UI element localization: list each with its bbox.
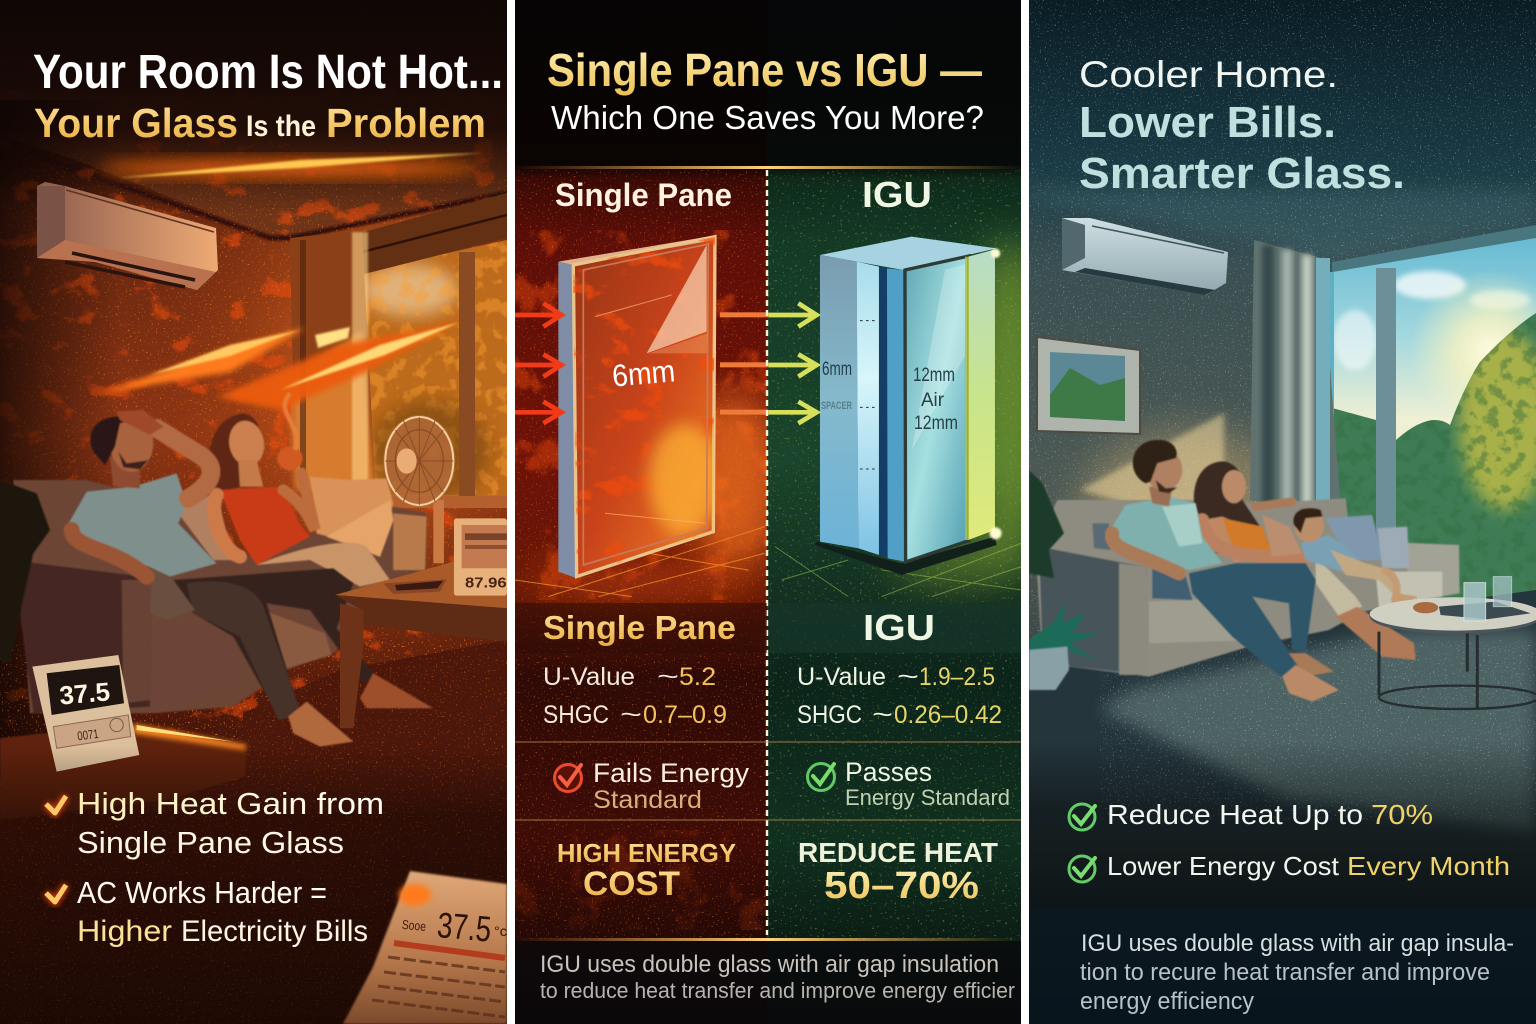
potted plant	[1029, 603, 1101, 690]
footer note: energy efficiency	[1080, 988, 1254, 1015]
spec table: IGU: ~	[872, 701, 893, 729]
benefit: reduce heat: 70%	[1371, 799, 1433, 830]
title: Cooler Home.	[1079, 54, 1338, 95]
benefit: lower energy cost	[1069, 851, 1510, 882]
icon: thermostat: 0071	[77, 727, 99, 743]
floor perspective lines	[515, 527, 1021, 597]
benefit: lower energy cost: Lower Energy Cost	[1107, 851, 1340, 881]
footer note	[1029, 908, 1536, 1024]
heat arrows	[515, 303, 817, 423]
sofa	[1036, 498, 1460, 677]
bullet: heat gain	[46, 786, 384, 860]
illustration: couple on sofa	[0, 393, 507, 820]
illustration: single pane glass	[558, 236, 715, 578]
callout: reduce heat	[798, 837, 998, 907]
coffee table	[1370, 577, 1536, 709]
plant on left	[1029, 470, 1064, 578]
floor and rug	[1029, 590, 1536, 830]
footer note: to reduce heat transfer and improve energy efficier	[540, 978, 1015, 1003]
receipt: electricity bill	[343, 871, 507, 1024]
spec table: IGU: IGU	[863, 607, 935, 648]
callout: reduce heat: 50–70%	[824, 865, 979, 907]
icon: electric fan	[383, 415, 455, 563]
heat beams through window	[100, 322, 460, 410]
bottom shade	[1029, 740, 1536, 1024]
status: passes energy standard: Energy Standard	[845, 785, 1010, 810]
callout: high energy cost	[557, 838, 736, 903]
footer glow line	[515, 938, 1021, 941]
bullet: heat gain: High Heat Gain from	[77, 786, 384, 821]
footer note: IGU uses double glass with air gap insula-	[1081, 930, 1514, 957]
status: passes energy standard	[808, 757, 1010, 810]
title	[34, 54, 500, 138]
sunlight patch on wall	[1080, 413, 1224, 510]
spec table: single pane	[515, 603, 767, 729]
plant	[0, 480, 50, 663]
title: Which One Saves You More?	[551, 99, 984, 136]
title: Smarter Glass.	[1079, 149, 1405, 198]
window with sky and trees	[1320, 225, 1536, 610]
spec table: single pane: Single Pane	[543, 609, 736, 646]
icon: air conditioner	[1062, 218, 1228, 295]
spec table: single pane: 5.2	[679, 663, 716, 691]
desk display: 87.96	[465, 575, 507, 591]
IGU layer labels: Air	[921, 390, 945, 411]
status: fails energy standard: Standard	[593, 786, 702, 814]
footer note: IGU uses double glass with air gap insulation	[540, 951, 999, 978]
woman	[1194, 462, 1416, 660]
status: fails energy standard	[554, 758, 750, 814]
glass fire texture	[573, 237, 721, 577]
title: Single Pane vs IGU —	[547, 44, 982, 96]
receipt: electricity bill: Sooe	[401, 917, 427, 934]
column header: IGU: IGU	[862, 174, 932, 215]
bullet: heat gain: Single Pane Glass	[77, 825, 344, 860]
spec table: IGU: 0.26–0.42	[894, 701, 1002, 729]
IGU layer labels	[821, 359, 958, 434]
IGU layer labels: 12mm	[913, 365, 955, 386]
icon: air conditioner	[37, 182, 218, 290]
woman	[207, 393, 390, 587]
title	[1079, 54, 1405, 198]
panel: single pane vs IGU comparison	[515, 0, 1050, 1024]
bullet: electricity bills: AC Works Harder =	[77, 875, 327, 910]
carpet speckle	[0, 640, 507, 1024]
title: Problem	[326, 100, 486, 146]
title: Your Room Is Not Hot...	[33, 46, 503, 99]
wall picture	[1037, 337, 1140, 434]
receipt: electricity bill: °c	[494, 923, 507, 939]
callout: reduce heat: REDUCE HEAT	[798, 837, 998, 868]
panel: hot room problem	[0, 0, 507, 1024]
benefit: reduce heat: Reduce Heat Up to	[1107, 799, 1363, 830]
illustration: family on sofa	[1029, 440, 1536, 709]
curtain	[1250, 240, 1340, 515]
glass highlight	[583, 244, 708, 565]
illustration: insulated glass unit	[815, 237, 1002, 575]
benefit: lower energy cost: Every Month	[1347, 851, 1510, 881]
icon: thermostat: 37.5	[58, 676, 111, 711]
bottom shade	[0, 745, 507, 1024]
bullet: electricity bills: Electricity Bills	[181, 915, 368, 948]
center dashed divider	[766, 170, 768, 935]
status: passes energy standard: Passes	[845, 757, 932, 787]
child	[1294, 508, 1406, 603]
spec table: single pane: ~	[620, 701, 642, 729]
title	[548, 52, 983, 130]
receipt: electricity bill: 37.5	[436, 904, 493, 950]
curtain	[290, 230, 376, 500]
panel: cooler home solution	[1029, 0, 1536, 1024]
footer note: tion to recure heat transfer and improve	[1080, 959, 1490, 986]
label: 6mm single pane: 6mm	[611, 353, 677, 394]
spec table: IGU: 1.9–2.5	[919, 663, 995, 691]
spec table: IGU: SHGC	[797, 701, 862, 729]
sofa	[13, 477, 427, 713]
spec table: single pane: U-Value	[543, 663, 635, 691]
top glow line	[515, 166, 1021, 169]
spec table: IGU: ~	[897, 663, 919, 691]
callout: high energy cost: COST	[583, 865, 680, 903]
carpet	[0, 640, 507, 1024]
desk display	[454, 518, 507, 596]
man	[1107, 440, 1339, 702]
side table with glow	[0, 723, 247, 820]
IGU layer labels: SPACER	[821, 400, 852, 412]
bullet: electricity bills: Higher	[77, 915, 172, 948]
man	[67, 410, 433, 747]
window with orange trees	[360, 193, 507, 508]
spec table: IGU	[769, 603, 1021, 729]
row dividers	[515, 742, 1021, 820]
title: Is the	[246, 110, 316, 143]
IGU layer labels: 12mm	[914, 413, 958, 434]
status: fails energy standard: Fails Energy	[593, 758, 750, 788]
spec table: single pane: 0.7–0.9	[643, 701, 727, 729]
table	[335, 562, 507, 728]
column header: single pane: Single Pane	[555, 177, 732, 213]
title: Lower Bills.	[1079, 98, 1336, 147]
spec table: single pane: ~	[657, 663, 679, 691]
icon: thermostat	[32, 655, 139, 772]
IGU layer labels: 6mm	[822, 359, 852, 380]
bullet: electricity bills	[46, 875, 368, 948]
title: Your Glass	[34, 100, 238, 146]
callout: high energy cost: HIGH ENERGY	[557, 838, 736, 868]
footer note	[515, 941, 1021, 1024]
benefit: reduce heat	[1069, 799, 1433, 830]
spec table: IGU: U-Value	[797, 663, 886, 691]
heat streak under title	[100, 153, 483, 178]
spec table: single pane: SHGC	[543, 701, 609, 729]
